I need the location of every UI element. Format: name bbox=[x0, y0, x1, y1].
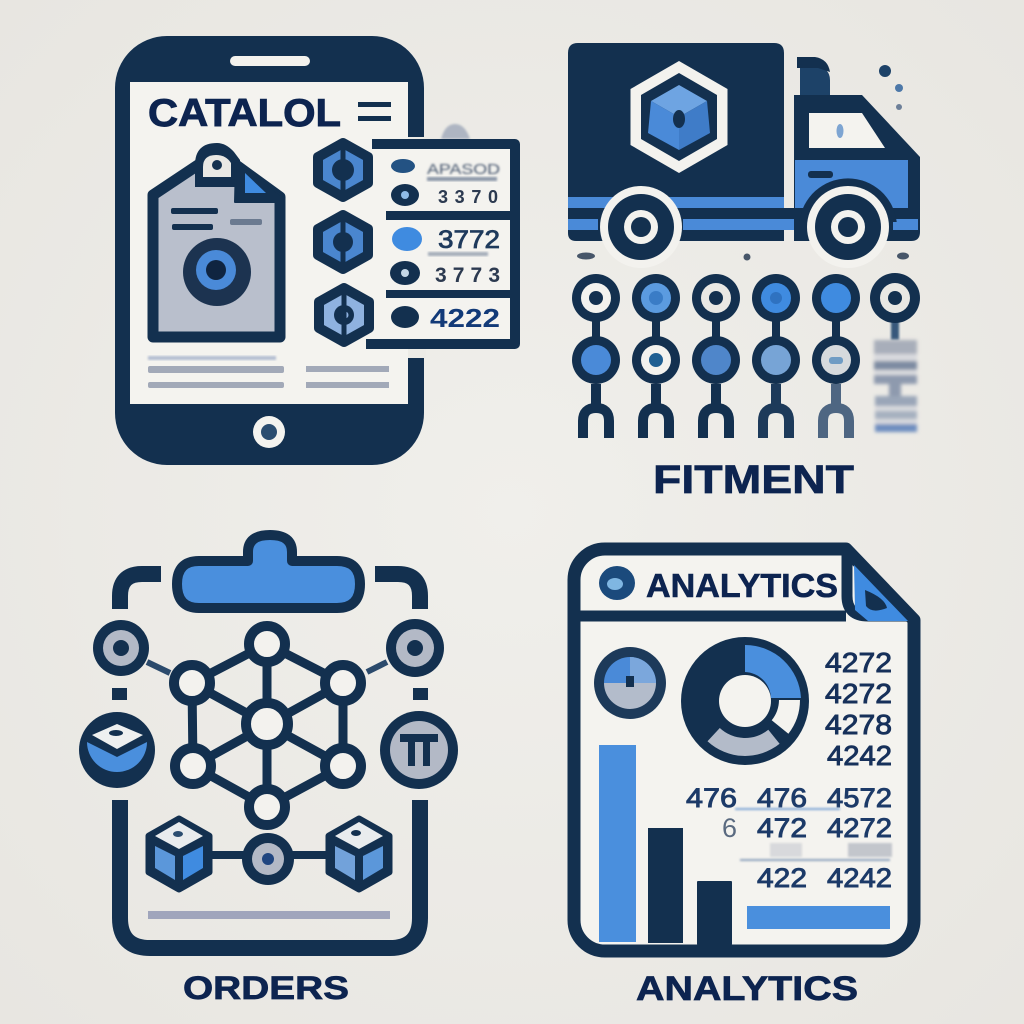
number table: 422 bbox=[757, 863, 807, 893]
number table: 4272 bbox=[827, 813, 892, 843]
wrench column four bbox=[752, 274, 800, 438]
analytics label: ANALYTICS bbox=[636, 970, 858, 1008]
side ticks bbox=[112, 688, 428, 700]
number column bbox=[825, 647, 892, 771]
wrench column two bbox=[632, 274, 680, 438]
row one: 3370 bbox=[438, 187, 498, 207]
number table: 472 bbox=[757, 813, 807, 843]
truck cab bbox=[784, 95, 920, 241]
header title: ANALYTICS bbox=[646, 567, 838, 604]
wrench column three bbox=[692, 274, 740, 438]
donut chart bbox=[681, 637, 809, 765]
number table: 476 bbox=[757, 783, 807, 813]
header icon bbox=[599, 566, 635, 600]
report header divider bbox=[578, 549, 912, 616]
ground dots bbox=[577, 252, 909, 260]
report outline bbox=[574, 549, 914, 951]
blurred table row bbox=[735, 809, 892, 861]
fitment label: FITMENT bbox=[653, 458, 854, 502]
hex badge three bbox=[319, 288, 369, 342]
bottom connector bbox=[210, 851, 326, 859]
edge gap behind list bbox=[408, 137, 426, 358]
tablet home button bbox=[253, 416, 285, 448]
product tag bbox=[153, 143, 284, 337]
icon: box badge bbox=[79, 712, 155, 788]
small pie chart bbox=[594, 647, 666, 719]
number column: 4272 bbox=[825, 647, 892, 678]
tablet speaker bbox=[230, 56, 310, 66]
panel: fitment truck bbox=[568, 43, 920, 502]
number table: 6 bbox=[722, 813, 737, 843]
truck cargo box bbox=[568, 43, 807, 241]
number column: 4278 bbox=[825, 709, 892, 740]
number table: 4572 bbox=[827, 783, 892, 813]
number table bbox=[686, 783, 892, 893]
side connectors bbox=[147, 662, 387, 673]
tablet screen bbox=[130, 82, 408, 404]
description lines bbox=[148, 356, 389, 388]
short navy bar bbox=[697, 881, 732, 945]
node top right bbox=[386, 619, 444, 677]
catalog heading: CATALOL bbox=[148, 92, 341, 135]
hex badge one bbox=[318, 143, 368, 197]
panel: orders clipboard bbox=[79, 535, 458, 1006]
row two: 3772 bbox=[438, 226, 500, 254]
cargo hexagon emblem bbox=[630, 61, 728, 173]
node top left bbox=[93, 620, 149, 676]
row two bbox=[390, 226, 500, 287]
wrench column five bbox=[812, 274, 860, 438]
number table: 476 bbox=[686, 783, 737, 813]
row three bbox=[391, 303, 500, 333]
orders label: ORDERS bbox=[183, 970, 349, 1006]
row one: APASOD bbox=[427, 161, 500, 178]
number column: 4242 bbox=[827, 740, 892, 771]
clipboard clip bbox=[177, 535, 360, 608]
clip bump bbox=[441, 124, 470, 139]
navy bar bbox=[648, 828, 683, 943]
row three: 4222 bbox=[430, 303, 500, 333]
rear wheel bbox=[600, 186, 682, 268]
tall blue bar bbox=[599, 745, 636, 942]
panel: catalog tablet bbox=[115, 36, 515, 465]
truck exhaust bbox=[797, 57, 830, 97]
left cube bbox=[149, 819, 209, 889]
page fold bbox=[854, 565, 908, 621]
row two: 3773 bbox=[435, 264, 500, 287]
bottom centre node bbox=[242, 833, 294, 885]
grey bar bbox=[148, 911, 390, 919]
heading menu lines bbox=[358, 102, 391, 121]
wrench column six bbox=[870, 273, 920, 432]
front wheel bbox=[799, 178, 897, 268]
parts list panel bbox=[366, 144, 515, 344]
horizontal blue bar bbox=[747, 906, 890, 929]
tablet body bbox=[115, 36, 424, 465]
exhaust dots bbox=[879, 65, 903, 110]
number table: 4242 bbox=[827, 863, 892, 893]
clipboard outline bbox=[120, 574, 420, 948]
right cube bbox=[329, 819, 389, 889]
panel: analytics report bbox=[574, 549, 914, 1008]
row one bbox=[391, 159, 500, 207]
network graph bbox=[174, 626, 361, 825]
hex badge two bbox=[318, 215, 368, 269]
icon: stand badge bbox=[380, 711, 458, 789]
wrench column one bbox=[572, 274, 620, 438]
number column: 4272 bbox=[825, 678, 892, 709]
